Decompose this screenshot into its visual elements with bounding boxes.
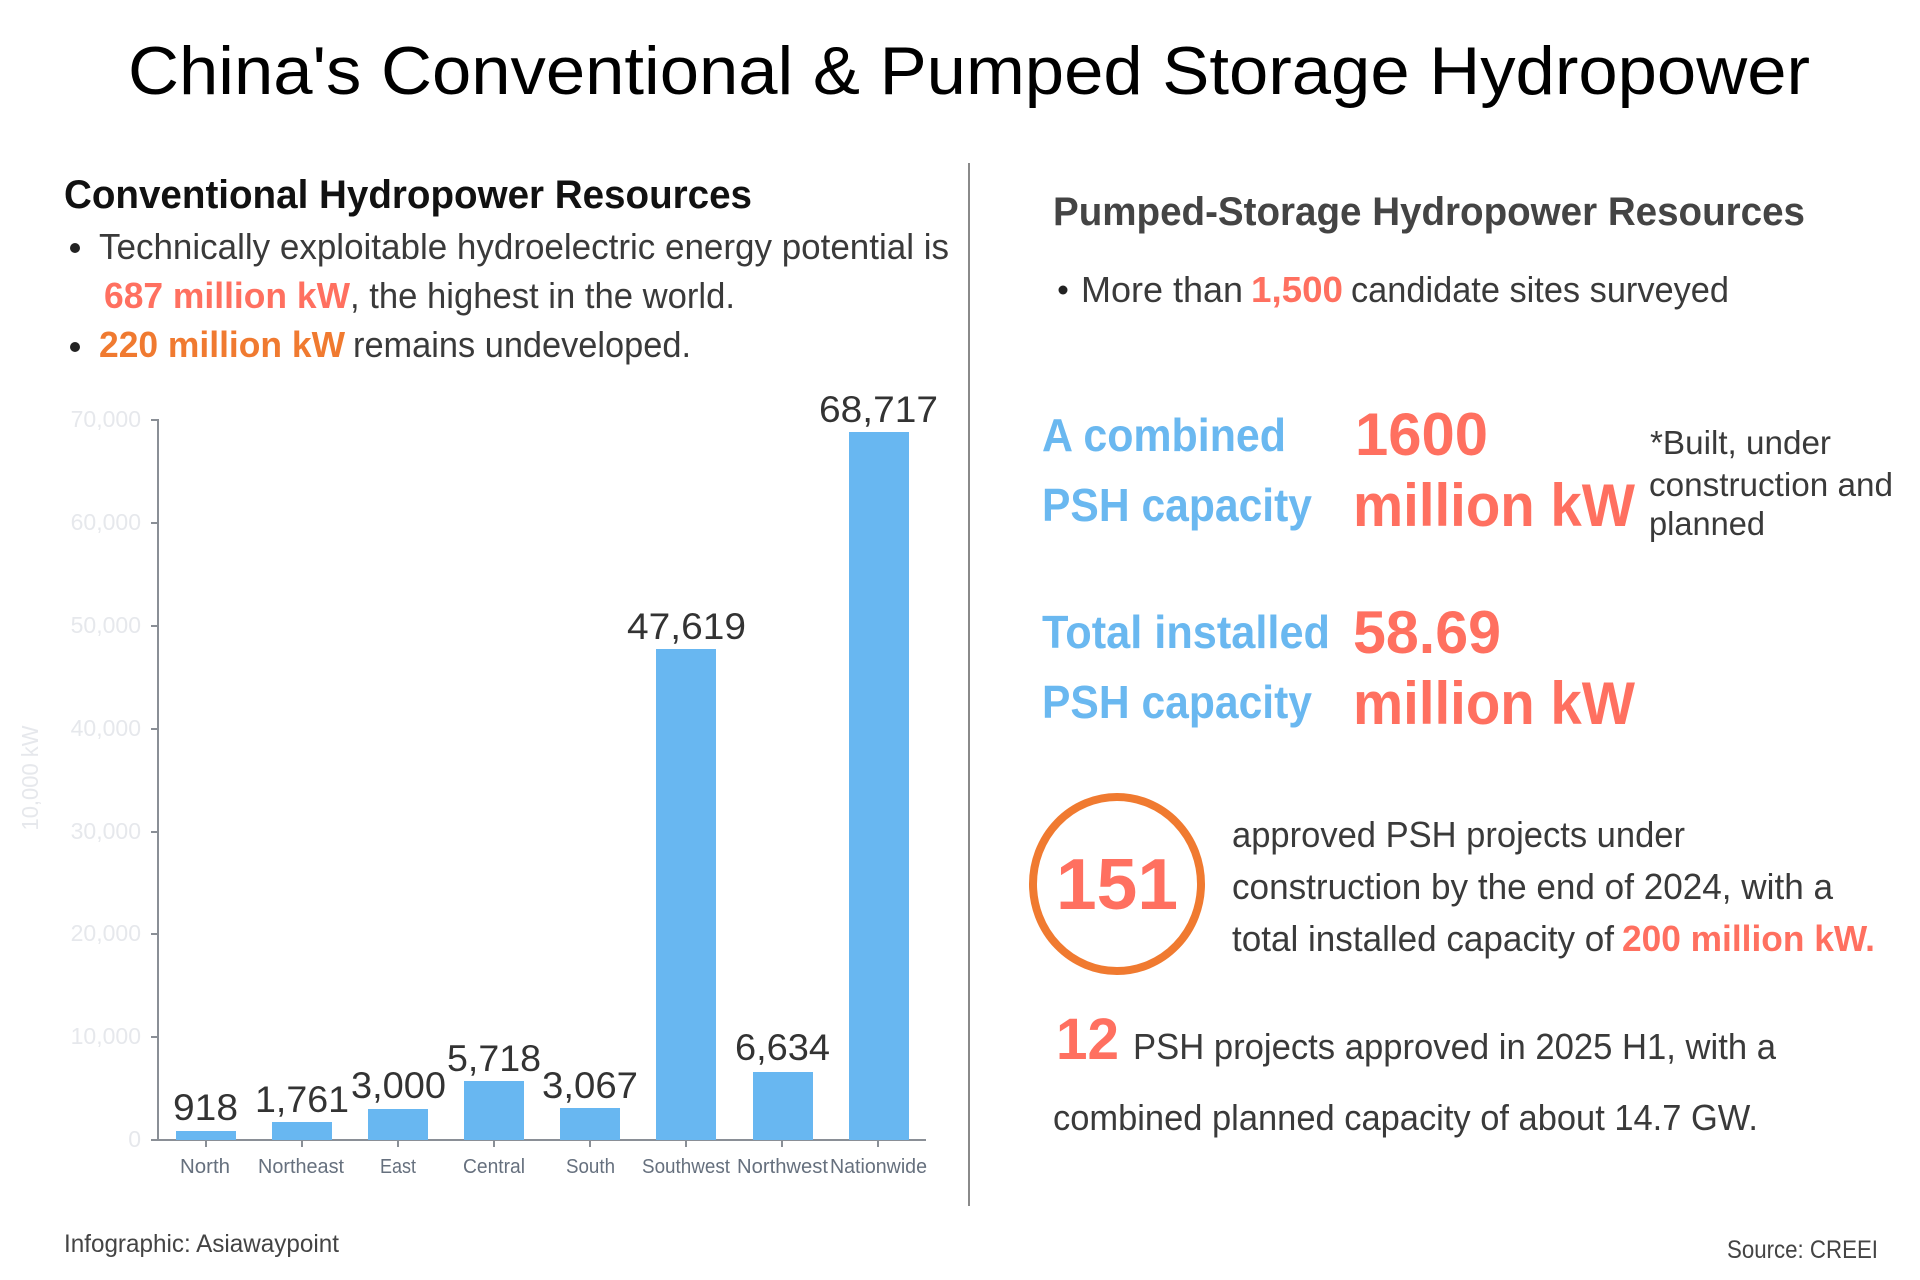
stat: total installed PSH capacity <box>1042 599 1635 737</box>
text: 12 projects approved <box>1053 1007 1777 1138</box>
text: approved PSH projects: 200 million kW. <box>1622 918 1875 959</box>
y axis tick labels: 30,000 <box>71 818 141 844</box>
footnote: built, under construction and planned: planned <box>1649 505 1765 542</box>
y axis tick labels: 70,000 <box>71 406 141 432</box>
text: 12 projects approved: combined planned capacity of about 14.7 GW. <box>1053 1097 1758 1138</box>
category labels: Central <box>463 1156 525 1178</box>
bar value labels: 68,717 <box>819 389 938 430</box>
bars <box>176 432 909 1140</box>
bullet text: undeveloped capacity <box>70 324 691 365</box>
bar chart: hydropower potential by region <box>17 389 938 1178</box>
bar value labels: 6,634 <box>735 1027 830 1068</box>
bullet text: candidate sites <box>1058 269 1729 310</box>
text: approved PSH projects: approved PSH projects under <box>1232 814 1685 855</box>
y axis tick labels: 50,000 <box>71 612 141 638</box>
stat: total installed PSH capacity: million kW <box>1353 670 1635 737</box>
text: approved PSH projects <box>1232 814 1875 959</box>
text: 12 projects approved: 12 <box>1056 1007 1119 1072</box>
bar value labels: 918 <box>173 1087 238 1128</box>
category labels: East <box>380 1156 416 1178</box>
y axis tick labels: 10,000 <box>71 1023 141 1049</box>
bullet text: undeveloped capacity: 220 million kW <box>99 324 345 365</box>
source: Source: CREEI <box>1727 1236 1878 1264</box>
bullet text: technically exploitable potential: , the highest in the world. <box>350 275 735 316</box>
bar value labels <box>173 389 938 1128</box>
text: approved PSH projects: construction by the end of 2024, with a <box>1232 866 1834 907</box>
bar value labels: 47,619 <box>627 606 746 647</box>
category labels: South <box>566 1156 615 1178</box>
bar value labels: 3,067 <box>542 1065 638 1106</box>
category labels: North <box>180 1156 230 1178</box>
panel: pumped-storage hydropower resources <box>1033 190 1893 1138</box>
stat: combined PSH capacity: 1600 <box>1355 401 1488 468</box>
axes <box>151 419 926 1147</box>
bar value labels: 3,000 <box>351 1065 446 1106</box>
footnote: built, under construction and planned: *Built, under <box>1650 424 1831 461</box>
bar value labels: 1,761 <box>255 1079 349 1120</box>
stat: combined PSH capacity: A combined <box>1042 409 1286 461</box>
heading: conventional hydropower: Conventional Hydropower Resources <box>64 173 752 217</box>
stat: combined PSH capacity: million kW <box>1353 472 1635 539</box>
y axis label: 10,000 kW <box>17 725 43 830</box>
category labels <box>180 1156 927 1178</box>
category labels: Southwest <box>642 1156 730 1178</box>
stat: combined PSH capacity: PSH capacity <box>1042 479 1312 531</box>
stat: combined PSH capacity <box>1042 401 1635 539</box>
footnote: built, under construction and planned <box>1649 424 1893 542</box>
stat: total installed PSH capacity: 58.69 <box>1353 599 1501 666</box>
y axis tick labels <box>71 406 141 1152</box>
heading: pumped-storage hydropower: Pumped-Storage Hydropower Resources <box>1053 190 1805 234</box>
category labels: Nationwide <box>830 1156 927 1178</box>
bullet text: technically exploitable potential: 687 million kW <box>104 275 350 316</box>
y axis tick labels: 40,000 <box>71 715 141 741</box>
text: approved PSH projects: total installed capacity of <box>1232 918 1615 959</box>
credit: Infographic: Asiawaypoint <box>64 1230 339 1258</box>
bullet text: undeveloped capacity: remains undeveloped. <box>353 324 691 365</box>
vertical divider <box>968 163 970 1206</box>
panel: conventional hydropower resources <box>17 173 949 1178</box>
text: 12 projects approved: PSH projects approved in 2025 H1, with a <box>1133 1026 1777 1067</box>
title: China's Conventional & Pumped Storage Hydropower <box>128 33 1810 109</box>
y axis tick labels: 60,000 <box>71 509 141 535</box>
category labels: Northeast <box>258 1156 344 1178</box>
footnote: built, under construction and planned: construction and <box>1649 466 1893 503</box>
icon: circled 151: 151 <box>1056 845 1178 925</box>
bullet text: candidate sites: More than <box>1081 269 1243 310</box>
bullet text: candidate sites: 1,500 <box>1251 269 1343 310</box>
stat: total installed PSH capacity: Total installed <box>1042 606 1330 658</box>
stat: total installed PSH capacity: PSH capacity <box>1042 676 1312 728</box>
y axis tick labels: 20,000 <box>71 920 141 946</box>
y axis tick labels: 0 <box>128 1126 141 1152</box>
bullet text: technically exploitable potential <box>70 226 949 316</box>
icon: circled 151 <box>1033 797 1201 971</box>
bullet text: candidate sites: candidate sites surveyed <box>1351 269 1729 310</box>
category labels: Northwest <box>737 1156 828 1178</box>
bar value labels: 5,718 <box>447 1038 541 1079</box>
bullet text: technically exploitable potential: Technically exploitable hydroelectric energy potential is <box>99 226 949 267</box>
